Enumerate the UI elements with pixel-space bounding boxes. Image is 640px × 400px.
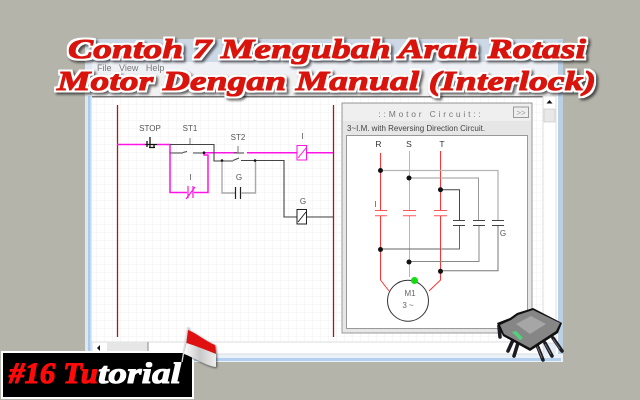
contact I (186, 173, 195, 199)
ST2 button (231, 133, 246, 160)
ladder diagram canvas (92, 96, 543, 343)
icon: microchip bug (497, 308, 562, 360)
junction dots (378, 168, 443, 274)
red phase lines (375, 151, 447, 291)
motor M1 (388, 277, 428, 321)
phase labels: R (375, 139, 382, 149)
motor M1: 3 ~ (402, 301, 414, 310)
collapse button: >> (516, 108, 526, 118)
horizontal scrollbar (92, 342, 543, 354)
coil I (297, 132, 306, 160)
panel title: ::Motor Circuit:: (378, 109, 484, 119)
panel: motor circuit (342, 103, 532, 333)
menu bar: File View Help (97, 63, 164, 73)
coil I: I (301, 132, 304, 141)
holding contact G wiring (222, 161, 256, 193)
junction dots (203, 151, 256, 162)
panel subtitle: 3~I.M. with Reversing Direction Circuit. (347, 124, 485, 133)
phase labels: S (406, 139, 412, 149)
badge: #16 Tutorial: #16 Tu (8, 357, 98, 390)
circuit canvas (346, 136, 528, 328)
contactor G: G (500, 229, 506, 238)
icon: Indonesian flag (182, 327, 216, 367)
stop button (139, 124, 161, 148)
motor M1: M1 (404, 289, 416, 298)
contact I: I (189, 173, 192, 182)
title: Contoh 7 Mengubah Arah Rotasi (68, 34, 587, 64)
stop button: STOP (139, 124, 161, 133)
power rails (118, 105, 334, 337)
phase labels: T (439, 139, 445, 149)
ladder diagram (117, 105, 334, 337)
de-energised black wiring (170, 144, 333, 217)
energised magenta wiring (117, 144, 333, 192)
application window (85, 39, 563, 362)
ST2 button: ST2 (231, 133, 246, 142)
title: Motor Dengan Manual (Interlock) (56, 66, 596, 96)
contact G: G (236, 173, 242, 182)
contact G (236, 173, 242, 199)
coil G (297, 197, 306, 224)
badge: #16 Tutorial (2, 352, 193, 398)
coil G: G (300, 197, 306, 206)
collapse button (514, 107, 528, 118)
phase labels (375, 139, 445, 149)
title (56, 34, 596, 96)
ST1 button (183, 124, 198, 152)
gray reversing wires (381, 170, 498, 271)
contactor G (453, 220, 506, 238)
badge: #16 Tutorial: torial (98, 357, 182, 390)
vertical scrollbar (543, 96, 556, 343)
contactor I label: I (374, 200, 377, 209)
ST1 button: ST1 (183, 124, 198, 133)
